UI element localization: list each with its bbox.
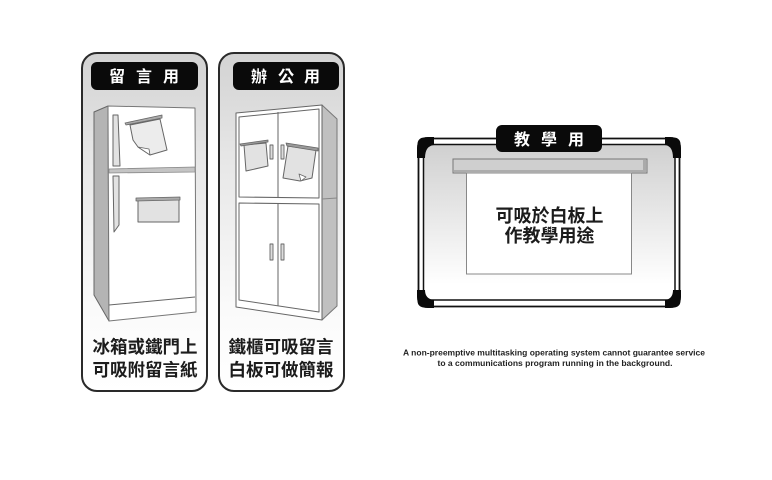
heading: 辦公用 <box>233 62 339 90</box>
whiteboard surface <box>424 145 675 300</box>
text: fridge caption: 冰箱或鐵門上 <box>92 337 198 357</box>
projection screen paper <box>466 173 632 274</box>
icon: refrigerator <box>94 106 196 321</box>
panel: office use (cabinet) <box>219 53 344 391</box>
text: English caption: A non-preemptive multitasking operating system cannot guarantee service <box>403 348 706 358</box>
panel frame <box>82 53 207 391</box>
text: English caption: to a communications program running in the background. <box>438 359 672 368</box>
icon: steel cabinet <box>236 105 337 320</box>
note: paper on left door <box>240 140 268 171</box>
text: cabinet caption: 白板可做簡報 <box>228 360 334 380</box>
text: cabinet caption: 鐵櫃可吸留言 <box>228 337 334 357</box>
note: curled paper on right door <box>283 143 318 181</box>
heading: 留言用 <box>91 62 198 90</box>
heading: 教學用: 教學用 <box>514 130 584 149</box>
text: fridge caption: 可吸附留言紙 <box>92 360 198 380</box>
projection screen tray <box>453 159 647 173</box>
note: curled paper on freezer door <box>125 115 167 155</box>
heading: 留言用: 留言用 <box>109 67 179 86</box>
panel: message use (fridge) <box>82 53 207 391</box>
note: paper on fridge door <box>136 197 180 222</box>
text: whiteboard message: 可吸於白板上 <box>496 205 604 226</box>
text: whiteboard message: 作教學用途 <box>504 225 594 246</box>
panel: teaching use (whiteboard) <box>417 125 681 308</box>
frame corners <box>417 137 681 308</box>
whiteboard frame <box>418 138 680 306</box>
heading: 辦公用: 辦公用 <box>251 68 320 86</box>
heading: 教學用 <box>496 125 602 152</box>
panel frame <box>219 53 344 391</box>
